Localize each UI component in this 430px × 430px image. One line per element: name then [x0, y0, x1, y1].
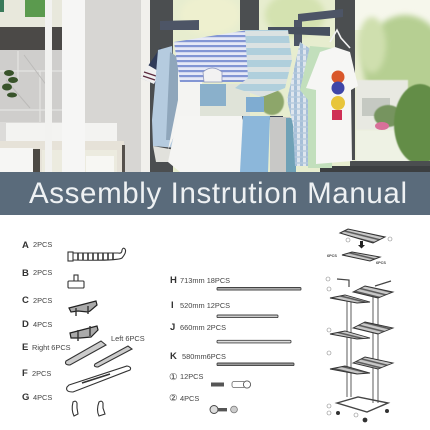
rod I: 520mm 12PCS — [180, 301, 230, 310]
rod K: K — [170, 351, 177, 362]
window view: jeans on rack — [200, 84, 250, 116]
left room: cabinets — [0, 0, 141, 172]
rod H: H — [170, 275, 177, 286]
rack tiers — [330, 286, 393, 374]
rod J: J — [170, 322, 175, 333]
screws 1: 12PCS — [180, 372, 203, 381]
plant — [2, 70, 18, 98]
icon: stacked fruit print — [331, 70, 345, 120]
second shelf: 6PCS — [376, 261, 386, 265]
part E: E — [22, 342, 28, 353]
screws 1: ① — [169, 372, 178, 383]
title: Assembly Instrution Manual — [29, 177, 407, 210]
clothes: green shirt — [300, 46, 332, 168]
part C — [22, 295, 97, 316]
part F: F — [22, 368, 28, 379]
clothes: white shirts — [168, 70, 202, 150]
rod I: I — [171, 300, 174, 311]
white posts — [45, 0, 150, 172]
banner — [0, 172, 430, 215]
part F — [22, 366, 131, 392]
clothes: white t-shirt — [306, 30, 358, 164]
clothes: blue striped shirt — [174, 30, 250, 82]
rod H — [170, 275, 301, 290]
screws 2 — [169, 393, 237, 414]
photo: room and garden scene — [0, 0, 430, 172]
rod K — [170, 351, 294, 366]
parts list: column 1 — [22, 240, 145, 416]
part A: A — [22, 240, 29, 251]
part E: Left 6PCS — [111, 334, 145, 343]
clothes: left navy tee — [140, 48, 175, 88]
clothes: teal striped shirt — [235, 30, 292, 97]
arrow — [358, 241, 365, 248]
second shelf — [327, 252, 386, 265]
part G: G — [22, 392, 29, 403]
base with castors — [336, 397, 389, 422]
part G — [22, 392, 105, 416]
part A — [22, 240, 126, 261]
top shelf — [340, 229, 392, 243]
parts list: column 2 — [169, 275, 301, 414]
window garden background — [150, 0, 430, 172]
clothes: blue jacket — [152, 46, 177, 148]
rod J — [170, 322, 291, 343]
clothes: red striped sleeve — [140, 65, 160, 84]
part D — [22, 319, 98, 341]
part E: Right 6PCS — [32, 343, 71, 352]
screws 2: 4PCS — [180, 394, 199, 403]
callout numbers — [326, 277, 358, 417]
part B: 2PCS — [33, 268, 52, 277]
screws 1 — [169, 372, 251, 388]
screws 2: ② — [169, 393, 178, 404]
part F: 2PCS — [32, 369, 51, 378]
rod J: 660mm 2PCS — [180, 323, 226, 332]
top hooks — [337, 279, 391, 287]
second shelf: 6PCS — [327, 254, 337, 258]
window frames — [150, 0, 430, 172]
rod I — [171, 300, 278, 318]
part B: B — [22, 268, 29, 279]
part B — [22, 268, 84, 288]
clothes: blue jeans — [240, 116, 270, 172]
part E — [22, 334, 145, 367]
rack poles — [347, 292, 378, 403]
assembled rack diagram — [326, 229, 393, 422]
clothes: white cloth bottom — [168, 116, 250, 172]
rod H: 713mm 18PCS — [180, 276, 230, 285]
clothes: checked shirt — [287, 42, 312, 166]
rod K: 580mm6PCS — [182, 352, 226, 361]
part C: C — [22, 295, 29, 306]
rack arms — [160, 9, 343, 120]
part D: 4PCS — [33, 320, 52, 329]
part C: 2PCS — [33, 296, 52, 305]
part A: 2PCS — [33, 240, 52, 249]
part D: D — [22, 319, 29, 330]
part G: 4PCS — [33, 393, 52, 402]
